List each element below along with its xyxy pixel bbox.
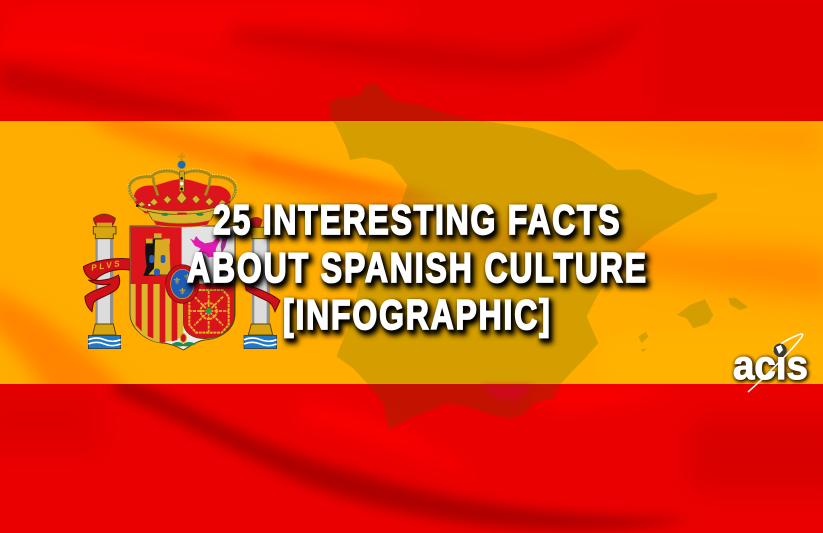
logo orbit swoosh [748, 334, 803, 392]
title shadow: ABOUT SPANISH CULTURE [190, 248, 649, 295]
quarter: Navarre [183, 284, 234, 339]
logo globe [774, 344, 786, 356]
coat of arms of Spain [83, 153, 280, 350]
pink tint on map at the southern coast [480, 385, 535, 402]
crown fleurons and band [136, 192, 230, 215]
Balearic islands [638, 297, 748, 352]
quarter: Aragon stripes [131, 284, 183, 343]
shield [130, 226, 235, 350]
left ribbon with PLVS [83, 258, 130, 312]
title text: 25 INTERESTING FACTS [213, 196, 620, 243]
title [187, 196, 649, 342]
left pillar [88, 214, 121, 349]
title shadow: 25 INTERESTING FACTS [216, 200, 623, 247]
central blue oval: ⚜ [183, 273, 192, 283]
right ribbon [245, 284, 280, 312]
quarter: Castile [131, 227, 182, 284]
central blue oval [166, 265, 199, 303]
title dark edge [188, 198, 648, 340]
title text: ABOUT SPANISH CULTURE [187, 244, 646, 291]
title dark edge: ABOUT SPANISH CULTURE [188, 246, 648, 293]
royal crown [128, 153, 237, 227]
acis logo [733, 334, 809, 392]
title text [187, 196, 646, 338]
central blue oval: ⚜ [173, 276, 181, 286]
central blue oval: ⚜ [178, 287, 187, 297]
crown arches [128, 169, 237, 201]
logo glow: acis [734, 343, 809, 389]
quarter: Leon [182, 227, 234, 284]
mainland Spain [328, 83, 717, 430]
left ribbon with PLVS: PLVS [90, 258, 121, 273]
title dark edge: [INFOGRAPHIC] [284, 293, 551, 340]
map of Spain silhouette [328, 83, 748, 430]
crown globe and cross [177, 160, 186, 169]
right pillar [244, 217, 277, 349]
logo wordmark: acis [733, 342, 808, 388]
crown red cap [134, 179, 231, 213]
title text: [INFOGRAPHIC] [283, 291, 550, 338]
title dark edge: 25 INTERESTING FACTS [214, 198, 621, 245]
title shadow: [INFOGRAPHIC] [286, 295, 553, 342]
title shadow [190, 200, 649, 342]
pomegranate base [172, 334, 196, 346]
